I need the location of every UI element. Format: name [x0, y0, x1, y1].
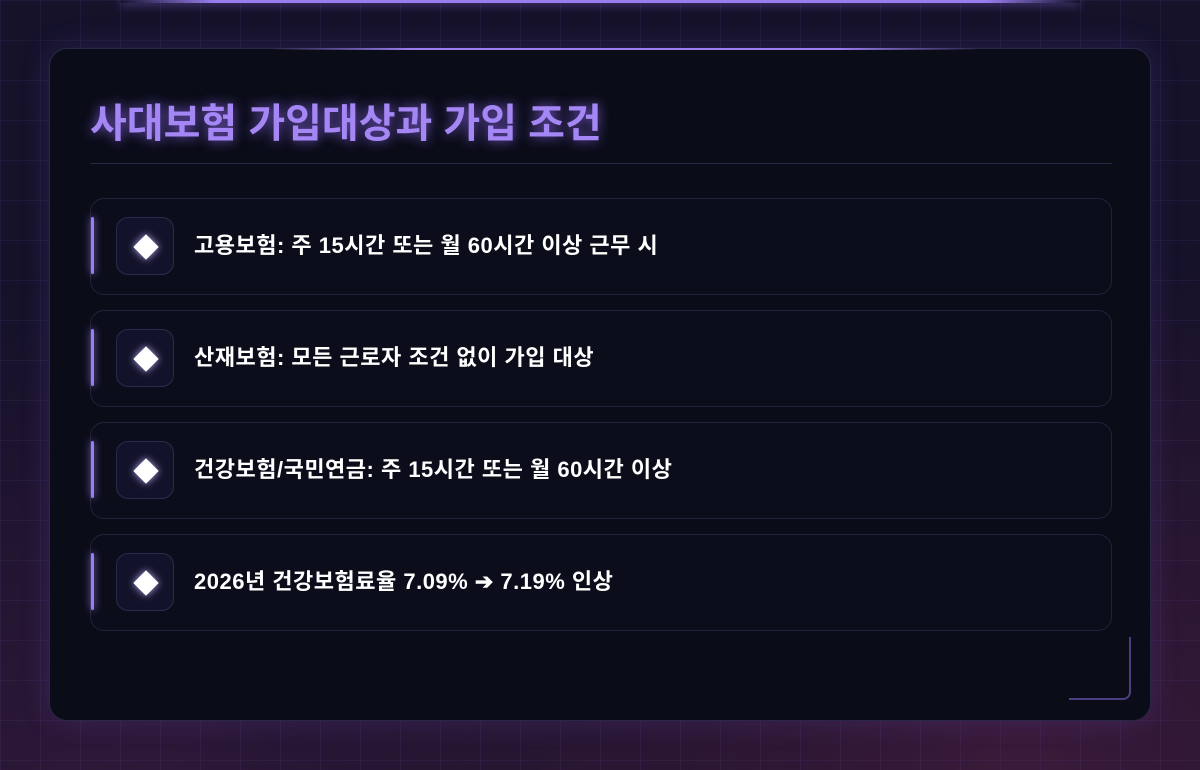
text: 건강보험/국민연금: 주 15시간 또는 월 60시간 이상: [194, 457, 672, 482]
text: 2026년 건강보험료율 7.09% ➔ 7.19% 인상: [194, 569, 613, 594]
item: 2026 rate: [90, 534, 1112, 631]
title: 사대보험 가입대상과 가입 조건: [90, 102, 602, 146]
icon: diamond: [116, 217, 174, 275]
icon: diamond: [116, 441, 174, 499]
item: health insurance / pension: [90, 422, 1112, 519]
item: industrial accident insurance: [90, 310, 1112, 407]
icon: diamond: [116, 553, 174, 611]
text: 고용보험: 주 15시간 또는 월 60시간 이상 근무 시: [194, 233, 658, 258]
item: employment insurance: [90, 198, 1112, 295]
text: 산재보험: 모든 근로자 조건 없이 가입 대상: [194, 345, 594, 370]
icon: diamond: [116, 329, 174, 387]
